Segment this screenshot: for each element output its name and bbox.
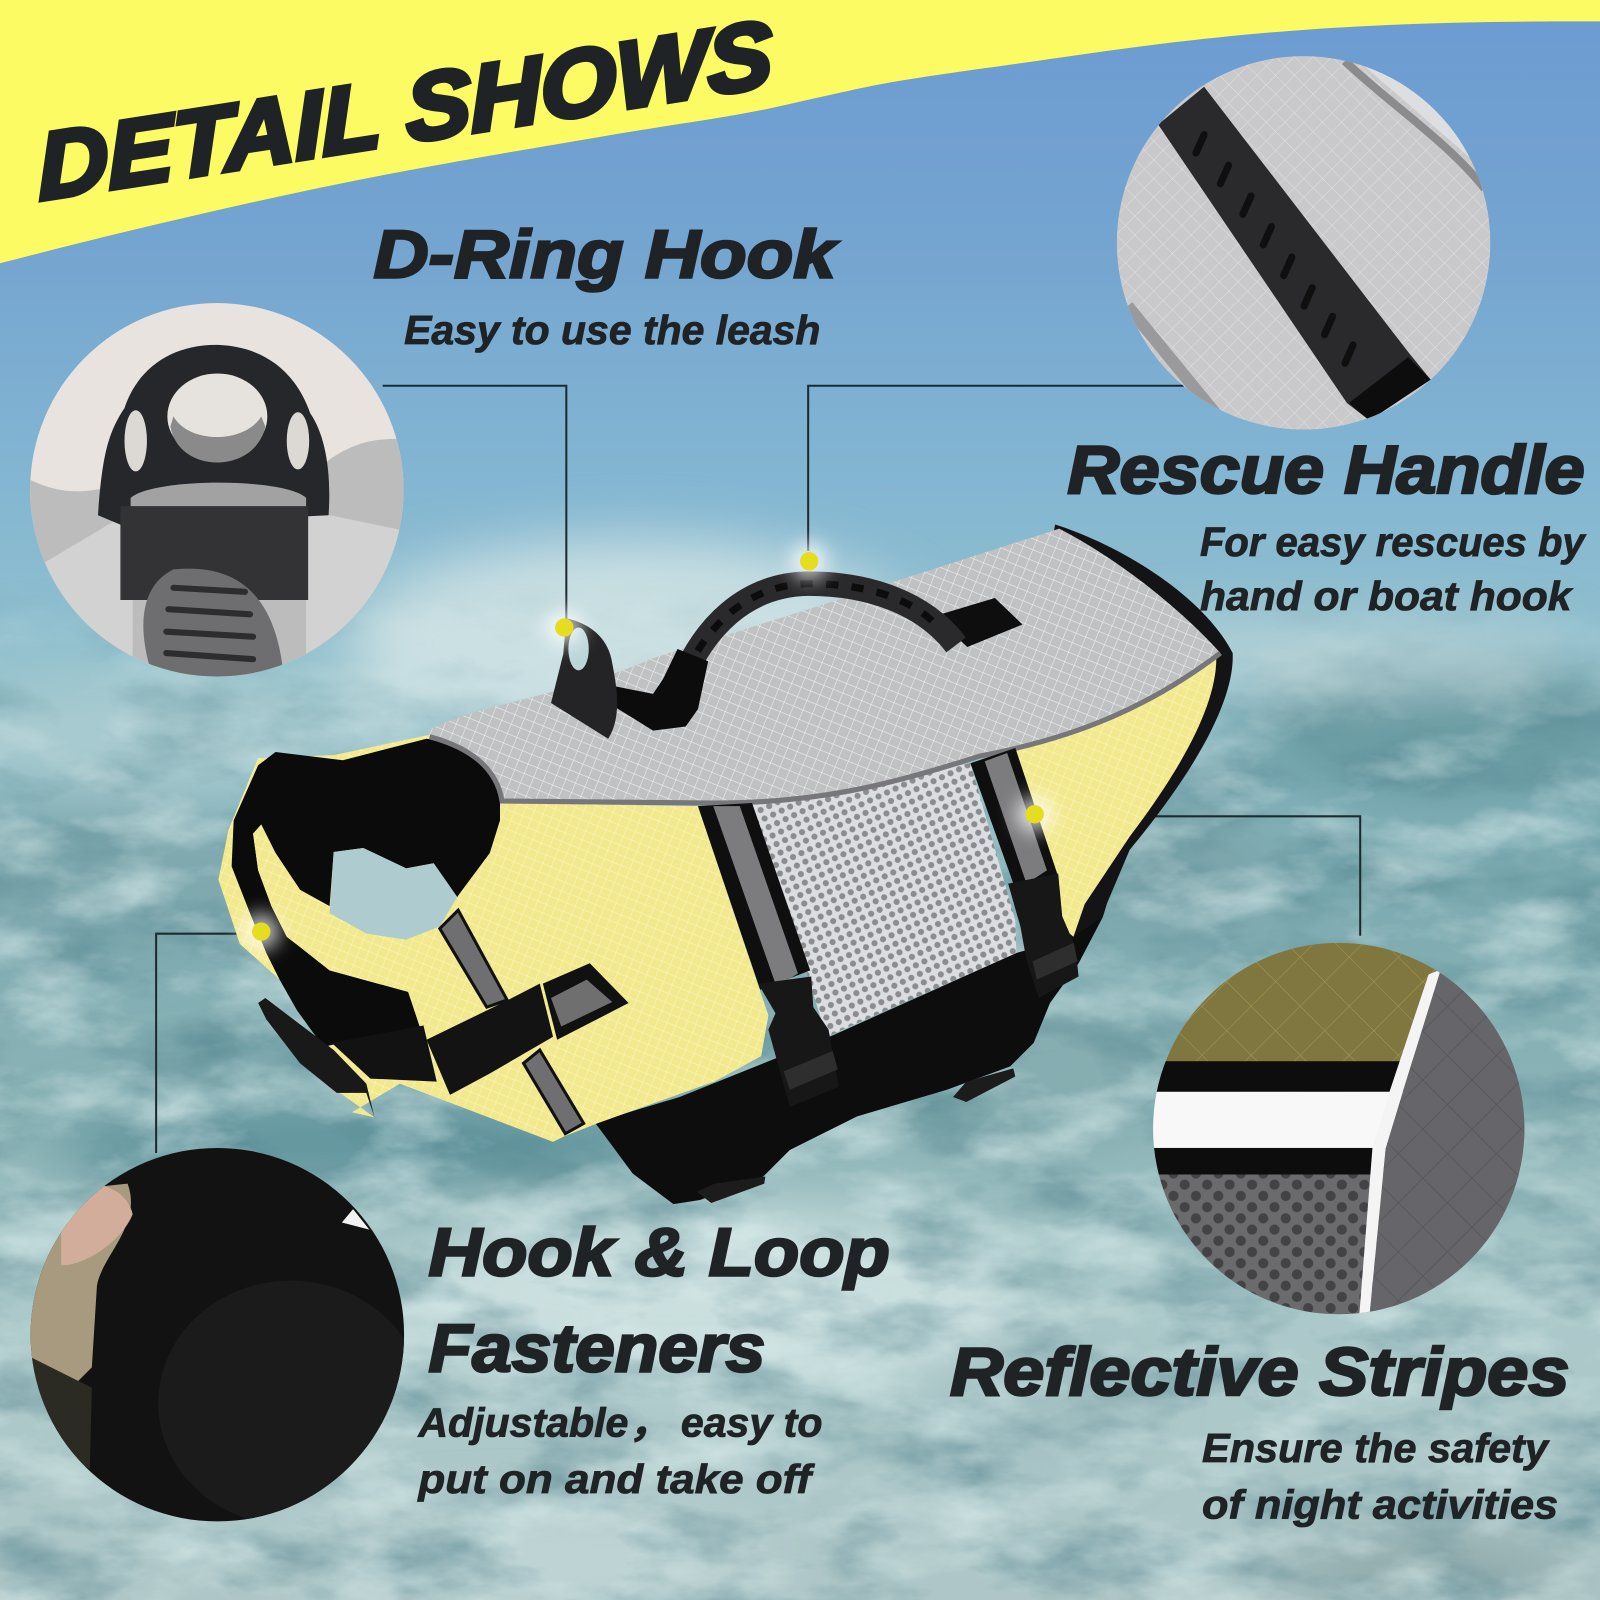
heading: Hook and Loop Fasteners: Hook & Loop (429, 1216, 890, 1291)
webbing: neck strap (332, 1026, 437, 1082)
vest: side strap left (698, 803, 810, 990)
vest: black belly (595, 916, 1103, 1204)
rescue handle (682, 584, 956, 682)
vest: chest reflective strap upper (440, 910, 507, 1007)
subtext: Reflective Stripes: Ensure the safety (1202, 1425, 1550, 1471)
heading: Hook and Loop Fasteners (429, 1216, 890, 1386)
life vest (218, 524, 1233, 1204)
vest: neck hole showing ocean (330, 848, 457, 940)
subtext: D-Ring Hook: Easy to use the leash (404, 307, 820, 353)
buckle: neck adjuster (258, 998, 374, 1117)
heading: Rescue Handle: Rescue Handle (1067, 433, 1585, 508)
vest: outer body yellow (218, 735, 768, 1142)
heading: Reflective Stripes: Reflective Stripes (950, 1335, 1569, 1410)
leader line: hook and loop (156, 934, 250, 1153)
subtext: Hook and Loop: Adjustable， easy to (417, 1400, 822, 1446)
handle webbing (610, 649, 708, 731)
leader line: reflective stripes (1041, 816, 1360, 936)
heading: D-Ring Hook: D-Ring Hook (373, 218, 840, 293)
vest: grey top panel (430, 529, 1220, 803)
vest: yellow collar band (253, 824, 502, 1029)
subtext: Reflective Stripes: of night activities (1202, 1481, 1558, 1527)
subtext: Rescue Handle (1200, 519, 1587, 619)
vest: chest reflective strap lower (523, 1050, 584, 1134)
clips: belly (697, 1068, 1015, 1203)
heading: Hook and Loop Fasteners: Fasteners (429, 1311, 765, 1386)
black D-ring (98, 345, 329, 526)
leader line: D-Ring (383, 386, 566, 622)
D-ring hook (551, 618, 617, 739)
webbing (120, 506, 308, 600)
yellow title banner (0, 0, 1600, 263)
subtext: Hook and Loop: put on and take off (417, 1456, 815, 1502)
vest: rear yellow panel (1010, 658, 1216, 937)
vest: chest strap (543, 963, 629, 1040)
title: DETAIL SHOWS: DETAIL SHOWS (35, 0, 775, 220)
buckle: side right (1008, 873, 1079, 998)
subtext: Rescue Handle: hand or boat hook (1200, 573, 1574, 619)
vest: side mesh panel (750, 763, 1016, 1037)
black handle (1158, 87, 1431, 420)
vest: inner black lining (232, 739, 500, 1047)
grey handle (143, 569, 284, 678)
photo circle: reflective stripe close-up (1152, 918, 1529, 1321)
photo circle: rescue handle close-up (1116, 51, 1500, 430)
buckle: side left (758, 977, 839, 1107)
handle strap tab (934, 598, 1022, 647)
callout dots (243, 543, 1053, 950)
vest: side strap right (970, 748, 1058, 892)
leader line: rescue handle (808, 386, 1184, 551)
photo circle: hook and loop close-up (30, 1147, 423, 1526)
subtext: Reflective Stripes (1202, 1425, 1558, 1527)
vest: grey panel piping (430, 653, 1220, 803)
vest: rear black edge (1010, 524, 1233, 963)
buckle: chest (427, 984, 553, 1095)
subtext: Rescue Handle: For easy rescues by (1200, 519, 1587, 565)
photo circle: D-ring close-up (30, 303, 404, 678)
subtext: Hook and Loop (417, 1400, 822, 1502)
